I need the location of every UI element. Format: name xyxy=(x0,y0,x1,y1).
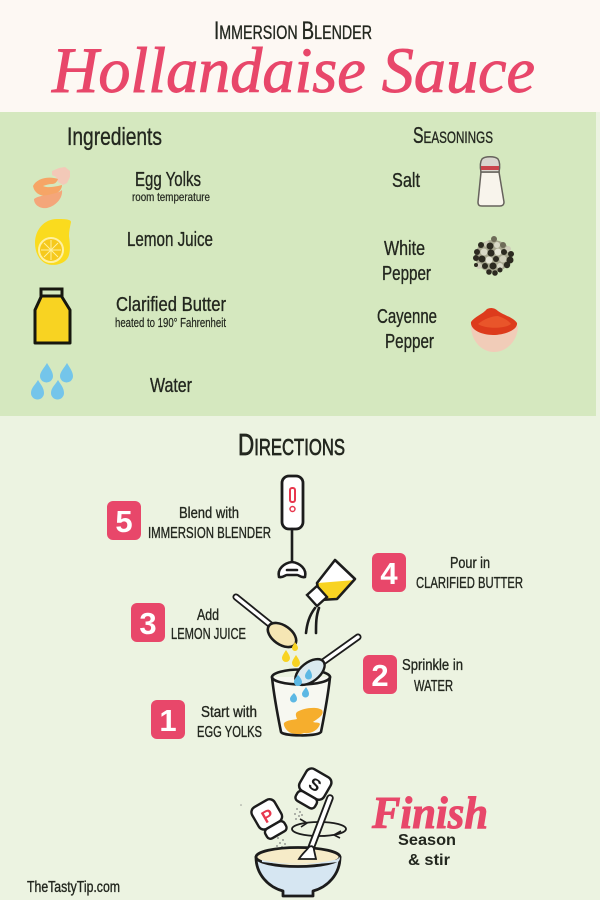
step 3: Add xyxy=(197,607,219,624)
icon: stirring spoon and motion arrows xyxy=(292,798,346,859)
step 2: WATER xyxy=(414,678,453,695)
note: room temperature: room temperature xyxy=(132,190,210,204)
badge: 5: 5 xyxy=(115,504,133,539)
icon: mixing bowl xyxy=(256,848,340,896)
label: white pepper: White xyxy=(384,238,425,260)
step 3 xyxy=(131,603,246,643)
label: lemon juice: Lemon Juice xyxy=(127,229,213,251)
heading: seasonings: SEASONINGS xyxy=(413,122,493,148)
label: egg yolks: Egg Yolks xyxy=(135,169,201,191)
heading: directions: DIRECTIONS xyxy=(238,427,345,462)
step 5: Blend with xyxy=(179,505,239,522)
label: cayenne pepper xyxy=(377,306,437,353)
icon: pepper shaker xyxy=(249,797,290,841)
icon: butter bottle pouring xyxy=(306,560,355,633)
step 1 xyxy=(151,700,262,741)
subtitle: IMMERSION BLENDER xyxy=(214,17,372,45)
step 5 xyxy=(107,501,271,542)
step 2: Sprinkle in xyxy=(402,657,463,674)
label: water: Water xyxy=(150,375,192,397)
icon: peppercorns xyxy=(473,236,514,276)
heading: ingredients: Ingredients xyxy=(67,123,162,151)
label: white pepper: Pepper xyxy=(382,263,431,285)
panel: ingredients and seasonings xyxy=(0,112,596,416)
icon: cayenne bowl xyxy=(471,308,518,352)
finish text: Season xyxy=(398,832,456,849)
icon: spoon with water xyxy=(291,637,358,690)
label: clarified butter: Clarified Butter xyxy=(116,294,226,316)
step 4: Pour in xyxy=(450,555,490,572)
step 1: Start with xyxy=(201,704,257,721)
badge: 4 xyxy=(372,553,406,592)
egg yolks in glass xyxy=(284,708,323,734)
badge: 4: 4 xyxy=(380,556,398,591)
label: egg yolks xyxy=(132,169,210,204)
finish text: & stir xyxy=(408,852,450,869)
note: heated: heated to 190° Fahrenheit xyxy=(115,315,226,330)
step 3: LEMON JUICE xyxy=(171,626,246,643)
icon: salt shaker pouring xyxy=(291,766,334,811)
finish text xyxy=(398,832,456,869)
step 4: CLARIFIED BUTTER xyxy=(416,575,523,592)
finish heading: Finish xyxy=(371,787,488,838)
label: cayenne pepper: Cayenne xyxy=(377,306,437,328)
icon: spoon with lemon juice xyxy=(236,597,301,652)
badge: 1: 1 xyxy=(159,703,177,738)
icon: salt shaker xyxy=(478,157,504,206)
icon: egg shells xyxy=(33,167,70,208)
icon: immersion blender xyxy=(279,476,305,577)
title: Hollandaise Sauce xyxy=(51,35,535,107)
icon: butter bottle xyxy=(35,289,70,343)
credit: TheTastyTip.com xyxy=(27,879,120,896)
step 4 xyxy=(372,553,523,592)
badge: 3: 3 xyxy=(139,606,157,641)
label: cayenne pepper: Pepper xyxy=(385,331,434,353)
icon: salt shaker pouring: S xyxy=(305,774,324,796)
step 5: IMMERSION BLENDER xyxy=(148,525,271,542)
step 1: EGG YOLKS xyxy=(197,724,262,741)
icon: glass xyxy=(272,670,330,735)
badge: 2: 2 xyxy=(371,658,389,693)
label: white pepper xyxy=(382,238,431,285)
header panel xyxy=(0,0,600,112)
icon: water drops xyxy=(31,363,73,400)
seasoning specks xyxy=(240,804,303,848)
label: salt: Salt xyxy=(392,170,420,192)
badge: 5 xyxy=(107,501,141,540)
label: clarified butter xyxy=(115,294,226,330)
step 2 xyxy=(363,655,463,695)
icon: lemon xyxy=(35,219,71,265)
icon: falling drops xyxy=(282,642,312,702)
icon: pepper shaker: P xyxy=(258,805,277,827)
